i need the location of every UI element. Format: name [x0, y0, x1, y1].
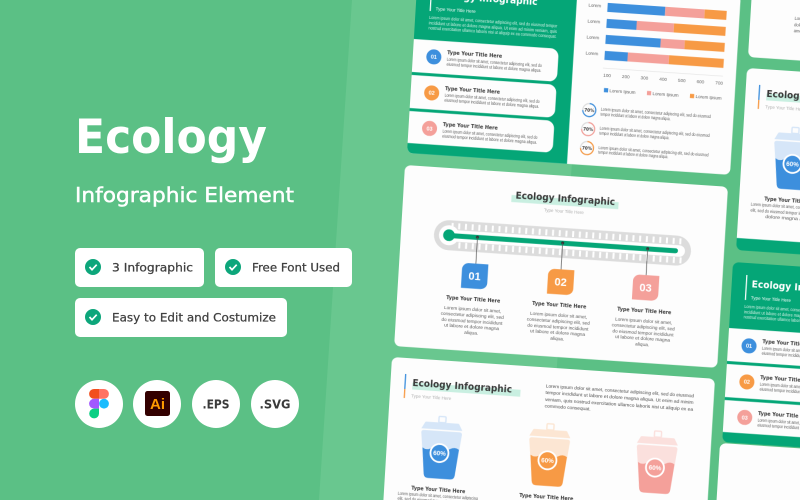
- row 01: [727, 328, 800, 370]
- stacked bar chart: Lorem: [586, 51, 599, 56]
- title: Ecology: [75, 110, 267, 165]
- stacked bar chart: Lorem: [587, 19, 601, 24]
- cup: pink: 60%: [648, 465, 662, 472]
- panel: right green card: Type Your Title Here: [751, 295, 792, 303]
- stacked bar chart: 600: [696, 79, 705, 85]
- icon: figma: [75, 380, 123, 428]
- panel: top card with chart: nostrud exercitation ullamco laboris nisi ut aliquip ex ea commodo consequat.: [428, 25, 557, 39]
- row 02: [725, 364, 800, 406]
- progress: blue: tempor incididunt ut labore et dolore magna aliqua.: [600, 111, 671, 121]
- panel: top card with chart: [407, 0, 741, 175]
- cup: pink: [627, 429, 686, 500]
- panel: thermometer timeline card: Ecology Infographic: [515, 191, 615, 208]
- paragraph: veniam, quis nostrud exercitation ullamco laboris nisi ut aliquip ex ea: [545, 397, 694, 413]
- row 02: Type Your Title Here: [445, 86, 501, 96]
- badge: free font used: [215, 248, 352, 287]
- step 02: Type Your Title Here: [532, 301, 587, 311]
- row 01: [412, 39, 559, 82]
- cup: orange: [519, 422, 578, 500]
- stacked bar chart: Lorem: [588, 3, 602, 8]
- stacked bar chart: 400: [659, 77, 668, 82]
- step 02: aliqua.: [550, 335, 564, 341]
- lighter diagonal band: [319, 0, 584, 500]
- progress: orange: [580, 141, 709, 163]
- stacked bar chart: 200: [622, 74, 630, 80]
- row 03: 03: [426, 126, 433, 133]
- step 03: Type Your Title Here: [617, 307, 672, 317]
- step 03: 03: [639, 282, 652, 295]
- badge: 3 infographic: 3 Infographic: [112, 260, 193, 274]
- icon: svg: .SVG: [260, 398, 290, 412]
- row 03: 03: [741, 415, 748, 422]
- icon: eps: .EPS: [202, 398, 230, 412]
- row 03: Type Your Title Here: [443, 122, 498, 132]
- progress: pink: 70%: [583, 126, 594, 132]
- panel: top card with chart: Type Your Title Here: [436, 6, 476, 14]
- chart legend: [604, 88, 722, 101]
- row 02: Lorem ipsum dolor sit amet, consectetur adipiscing elit, sed do: [444, 93, 540, 104]
- icon: illustrator: Ai: [150, 396, 165, 413]
- badge: easy to edit: Easy to Edit and Costumize: [112, 310, 276, 324]
- cup: blue: 60%: [433, 450, 446, 458]
- step 01: [440, 234, 509, 337]
- icon: illustrator: [133, 380, 181, 428]
- row 02: eiusmod tempor incididunt ut labore et dolore magna aliqua.: [444, 98, 539, 109]
- step 02: [526, 239, 595, 343]
- progress: pink: Lorem ipsum dolor sit amet, consectetur adipiscing elit, sed do eiusmod: [600, 126, 710, 138]
- row 03: [723, 400, 800, 441]
- panel: cups card: Type Your Title Here: [411, 393, 452, 401]
- stacked bar chart: Lorem: [587, 35, 600, 40]
- step 02: 02: [554, 277, 567, 289]
- paragraph: [544, 383, 694, 419]
- progress: pink: [581, 122, 711, 144]
- step 03: [611, 245, 680, 349]
- step 03: ut labore et dolore magna: [615, 334, 671, 343]
- paragraph: commodo consequat.: [544, 403, 591, 413]
- step 01: 01: [468, 271, 481, 284]
- step 01: aliqua.: [464, 330, 478, 336]
- badge: free font used: Free Font Used: [252, 260, 340, 274]
- panel: top card with chart: Lorem ipsum dolor sit amet, consectetur adipiscing elit, sed do eiusmod tempor: [429, 15, 558, 29]
- step 03: consectetur adipiscing elit, sed: [612, 322, 676, 332]
- row 03: eiusmod tempor incididunt ut labore et dolore magna aliqua.: [442, 133, 537, 145]
- step 02: ut labore et dolore magna: [530, 328, 586, 337]
- panel: right cup card: [736, 68, 800, 259]
- step 02: do eiusmod tempor incididunt: [527, 322, 590, 332]
- paragraph: tempor incididunt ut labore et dolore magna aliqua. Ut enim ad minim: [545, 390, 694, 406]
- badge: 3 infographic: [75, 248, 204, 287]
- step 03: aliqua.: [635, 341, 649, 347]
- row 02: 02: [744, 380, 750, 386]
- progress: blue: [582, 103, 712, 125]
- cup: blue: [397, 414, 483, 500]
- panel: cups card: Ecology Infographic: [412, 378, 512, 396]
- badge: easy to edit: [75, 298, 287, 337]
- stacked bar chart: 500: [678, 78, 686, 83]
- step 01: consectetur adipiscing elit, sed: [441, 311, 505, 320]
- progress: blue: 70%: [584, 107, 595, 113]
- row 01: 01: [431, 55, 437, 61]
- stacked bar chart: 700: [715, 80, 724, 86]
- progress: pink: tempor incididunt ut labore et dolore magna aliqua.: [599, 130, 670, 140]
- chart legend: Lorem Ipsum: [652, 91, 679, 98]
- stacked bar chart: 300: [640, 75, 649, 81]
- step 02: Lorem ipsum dolor sit amet,: [530, 311, 587, 320]
- icon: svg: [251, 380, 299, 428]
- progress: orange: tempor incididunt ut labore et dolore magna aliqua.: [598, 149, 668, 159]
- cup: orange: 60%: [541, 457, 554, 465]
- panel: bottom right partial card: [716, 443, 800, 500]
- row 01: eiusmod tempor incididunt ut labore et dolore magna aliqua.: [446, 62, 542, 73]
- thermometer: [433, 219, 692, 267]
- step 01: Type Your Title Here: [446, 295, 501, 305]
- progress: orange: 70%: [582, 145, 593, 151]
- row 01: Lorem ipsum dolor sit amet, consectetur adipiscing elit, sed do: [447, 57, 542, 68]
- paragraph: Lorem ipsum dolor sit amet, consectetur adipiscing elit, sed do eiusmod: [546, 383, 694, 399]
- progress: blue: Lorem ipsum dolor sit amet, consectetur adipiscing elit, sed do eiusmod: [601, 107, 711, 119]
- panel: thermometer timeline card: [394, 165, 728, 368]
- chart legend: Lorem Ipsum: [609, 88, 636, 95]
- stacked bar chart: 100: [603, 73, 612, 78]
- chart legend: Lorem Ipsum: [695, 94, 722, 101]
- stacked bar chart: [584, 2, 728, 86]
- cup: blue: Type Your Title Here: [411, 486, 466, 495]
- icon: eps: [192, 380, 240, 428]
- step 03: Lorem ipsum dolor sit amet,: [615, 317, 672, 326]
- subtitle: Infographic Element: [75, 183, 294, 207]
- progress: orange: Lorem ipsum dolor sit amet, consectetur adipiscing elit, sed do eiusmod: [598, 145, 709, 157]
- panel: thermometer timeline card: Type Your Title Here: [544, 208, 585, 215]
- panel: right green card: [722, 262, 800, 452]
- panel: top right partial card: [748, 0, 800, 62]
- row 03: Lorem ipsum dolor sit amet, consectetur adipiscing elit, sed do: [442, 128, 538, 140]
- step 03: do eiusmod tempor incididunt: [612, 328, 675, 337]
- step 01: do eiusmod tempor incididunt: [441, 317, 504, 326]
- row 01: Type Your Title Here: [447, 50, 503, 60]
- row 01: 01: [746, 344, 752, 350]
- row 02: 02: [428, 91, 435, 97]
- panel: top card with chart: incididunt ut labore et dolore magna aliqua. Ut enim ad minim veniam, quis: [429, 20, 557, 34]
- row 02: [410, 75, 557, 118]
- step 01: Lorem ipsum dolor sit amet,: [444, 305, 501, 314]
- cup: blue partial: [750, 125, 800, 223]
- step 02: consectetur adipiscing elit, sed: [527, 317, 591, 326]
- panel: cups card: [382, 357, 715, 500]
- cup: blue partial: 60%: [786, 161, 799, 169]
- step 01: ut labore et dolore magna: [444, 322, 500, 331]
- row 03: [408, 111, 555, 153]
